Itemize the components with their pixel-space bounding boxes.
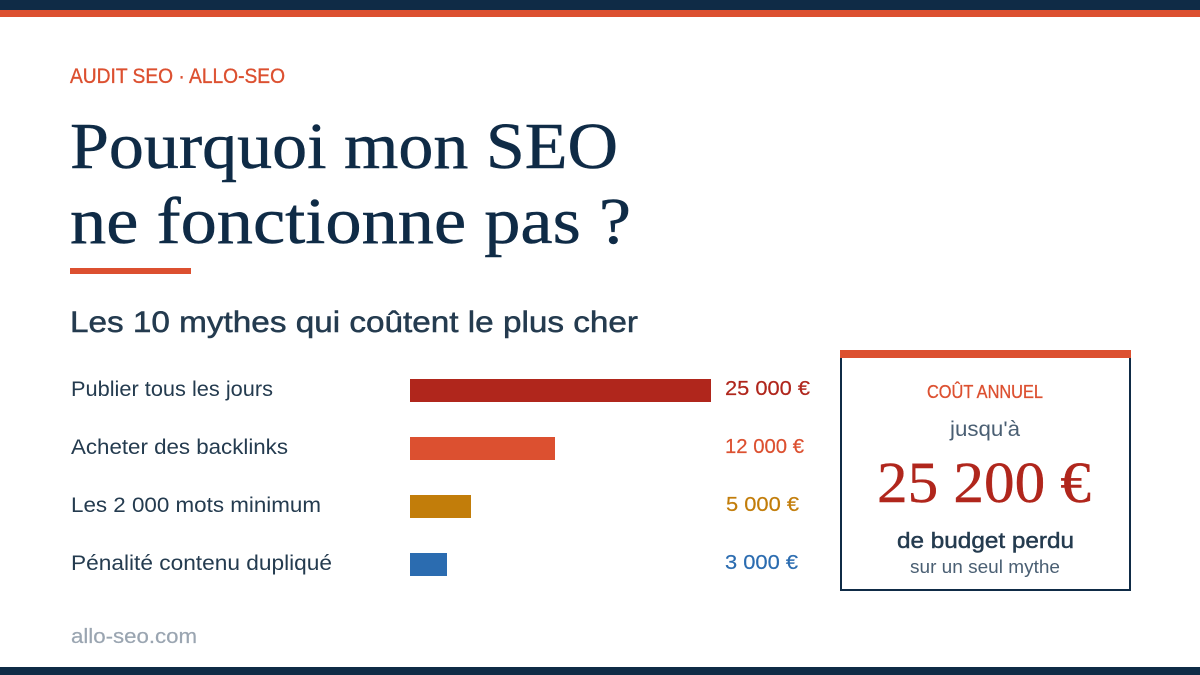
big number: 25 200 € xyxy=(877,450,1091,515)
sur un seul mythe: sur un seul mythe xyxy=(910,557,1060,577)
title underline xyxy=(70,268,191,274)
panel label: COÛT ANNUEL xyxy=(927,381,1043,402)
title: ne fonctionne pas ? xyxy=(70,185,631,258)
row: les 2 000 mots minimum: Les 2 000 mots minimum xyxy=(71,494,321,517)
row: les 2 000 mots minimum: 5 000 € xyxy=(726,493,800,516)
title: Pourquoi mon SEO xyxy=(70,110,618,183)
row: pénalité contenu dupliqué: 3 000 € xyxy=(725,551,799,574)
bar chart xyxy=(71,377,811,576)
panel: coût annuel xyxy=(840,350,1131,590)
de budget perdu: de budget perdu xyxy=(897,528,1074,553)
row: publier tous les jours xyxy=(71,377,811,402)
jusqu'à: jusqu'à xyxy=(949,418,1020,441)
row: pénalité contenu dupliqué xyxy=(71,551,799,576)
eyebrow: AUDIT SEO · ALLO-SEO xyxy=(70,65,285,88)
bottom band xyxy=(0,667,1200,675)
row: publier tous les jours: Publier tous les jours xyxy=(71,378,273,401)
title xyxy=(70,110,631,258)
subtitle: Les 10 mythes qui coûtent le plus cher xyxy=(70,306,638,339)
row: acheter des backlinks xyxy=(71,435,805,460)
row: les 2 000 mots minimum xyxy=(71,493,800,518)
footer url: allo-seo.com xyxy=(71,625,197,648)
row: pénalité contenu dupliqué: Pénalité contenu dupliqué xyxy=(71,552,332,575)
row: acheter des backlinks: 12 000 € xyxy=(725,435,805,458)
row: acheter des backlinks: Acheter des backlinks xyxy=(71,436,288,459)
row: publier tous les jours: 25 000 € xyxy=(725,377,811,400)
top band xyxy=(0,0,1200,17)
